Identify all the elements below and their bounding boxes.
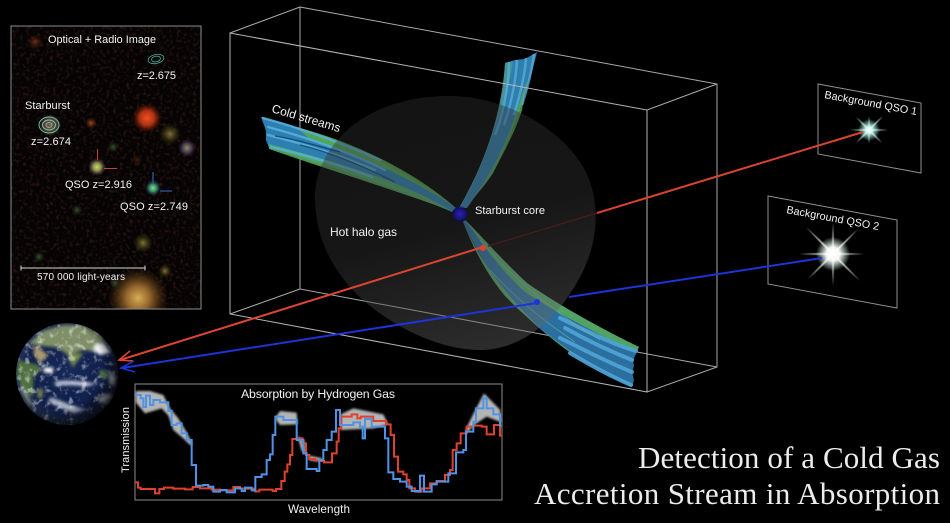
marker: QSO z=2.749 <box>153 172 172 191</box>
chart title: Absorption by Hydrogen Gas <box>241 387 395 401</box>
title <box>534 440 940 511</box>
sky image <box>11 26 201 328</box>
panel frame <box>11 26 201 309</box>
box: front edges <box>230 33 647 392</box>
uncertainty bands <box>136 391 501 462</box>
QSO 2 frame <box>768 196 897 308</box>
red spectrum <box>136 414 502 493</box>
label: hot halo gas: Hot halo gas <box>330 225 397 239</box>
cold stream: upper <box>459 52 537 208</box>
starburst core <box>452 206 468 222</box>
panel: 3D simulation box <box>230 7 717 392</box>
hot halo gas sphere <box>315 96 596 350</box>
panel: absorption chart <box>120 384 502 516</box>
panel: background QSO 2 <box>768 196 897 308</box>
panel heading: Optical + Radio Image <box>48 34 156 46</box>
panel: background QSO 1 <box>818 84 921 173</box>
marker: QSO z=2.916 <box>98 149 117 168</box>
label: QSO z=2.749: QSO z=2.749 <box>120 201 188 213</box>
QSO 1 frame <box>818 84 921 173</box>
box: rear edges <box>230 7 717 392</box>
icon: QSO 1 star <box>850 116 888 144</box>
radio contours: z=2.675 <box>147 53 165 65</box>
chart data <box>136 391 502 493</box>
cold stream: left <box>261 117 456 212</box>
title line 2: Accretion Stream in Absorption <box>534 476 940 511</box>
icon: QSO 2 star <box>799 222 864 286</box>
label: starburst core: Starburst core <box>475 205 545 217</box>
cold stream: lower right <box>463 220 639 387</box>
panel: optical + radio image <box>11 26 201 328</box>
x axis label: Wavelength <box>288 503 350 516</box>
QSO 2 label: Background QSO 2 <box>785 204 880 233</box>
icon: earth <box>16 323 118 425</box>
label: cold streams: Cold streams <box>270 101 342 135</box>
label: QSO z=2.916: QSO z=2.916 <box>65 179 132 191</box>
QSO 1 label: Background QSO 1 <box>823 89 918 118</box>
label: z=2.674: z=2.674 <box>31 136 71 148</box>
blue spectrum <box>136 395 501 492</box>
label: starburst: Starburst <box>25 100 70 112</box>
chart frame <box>135 384 502 500</box>
arrow: sightline QSO 1 to earth (red) <box>119 132 863 361</box>
label: z=2.675: z=2.675 <box>137 70 176 82</box>
scale bar <box>21 266 145 270</box>
y axis label: Transmission <box>120 407 132 473</box>
title line 1: Detection of a Cold Gas <box>638 440 940 475</box>
radio contours: starburst <box>39 117 59 133</box>
label: scale: 570 000 light-years <box>37 272 125 283</box>
arrow: sightline QSO 2 to earth (blue) <box>121 258 822 372</box>
